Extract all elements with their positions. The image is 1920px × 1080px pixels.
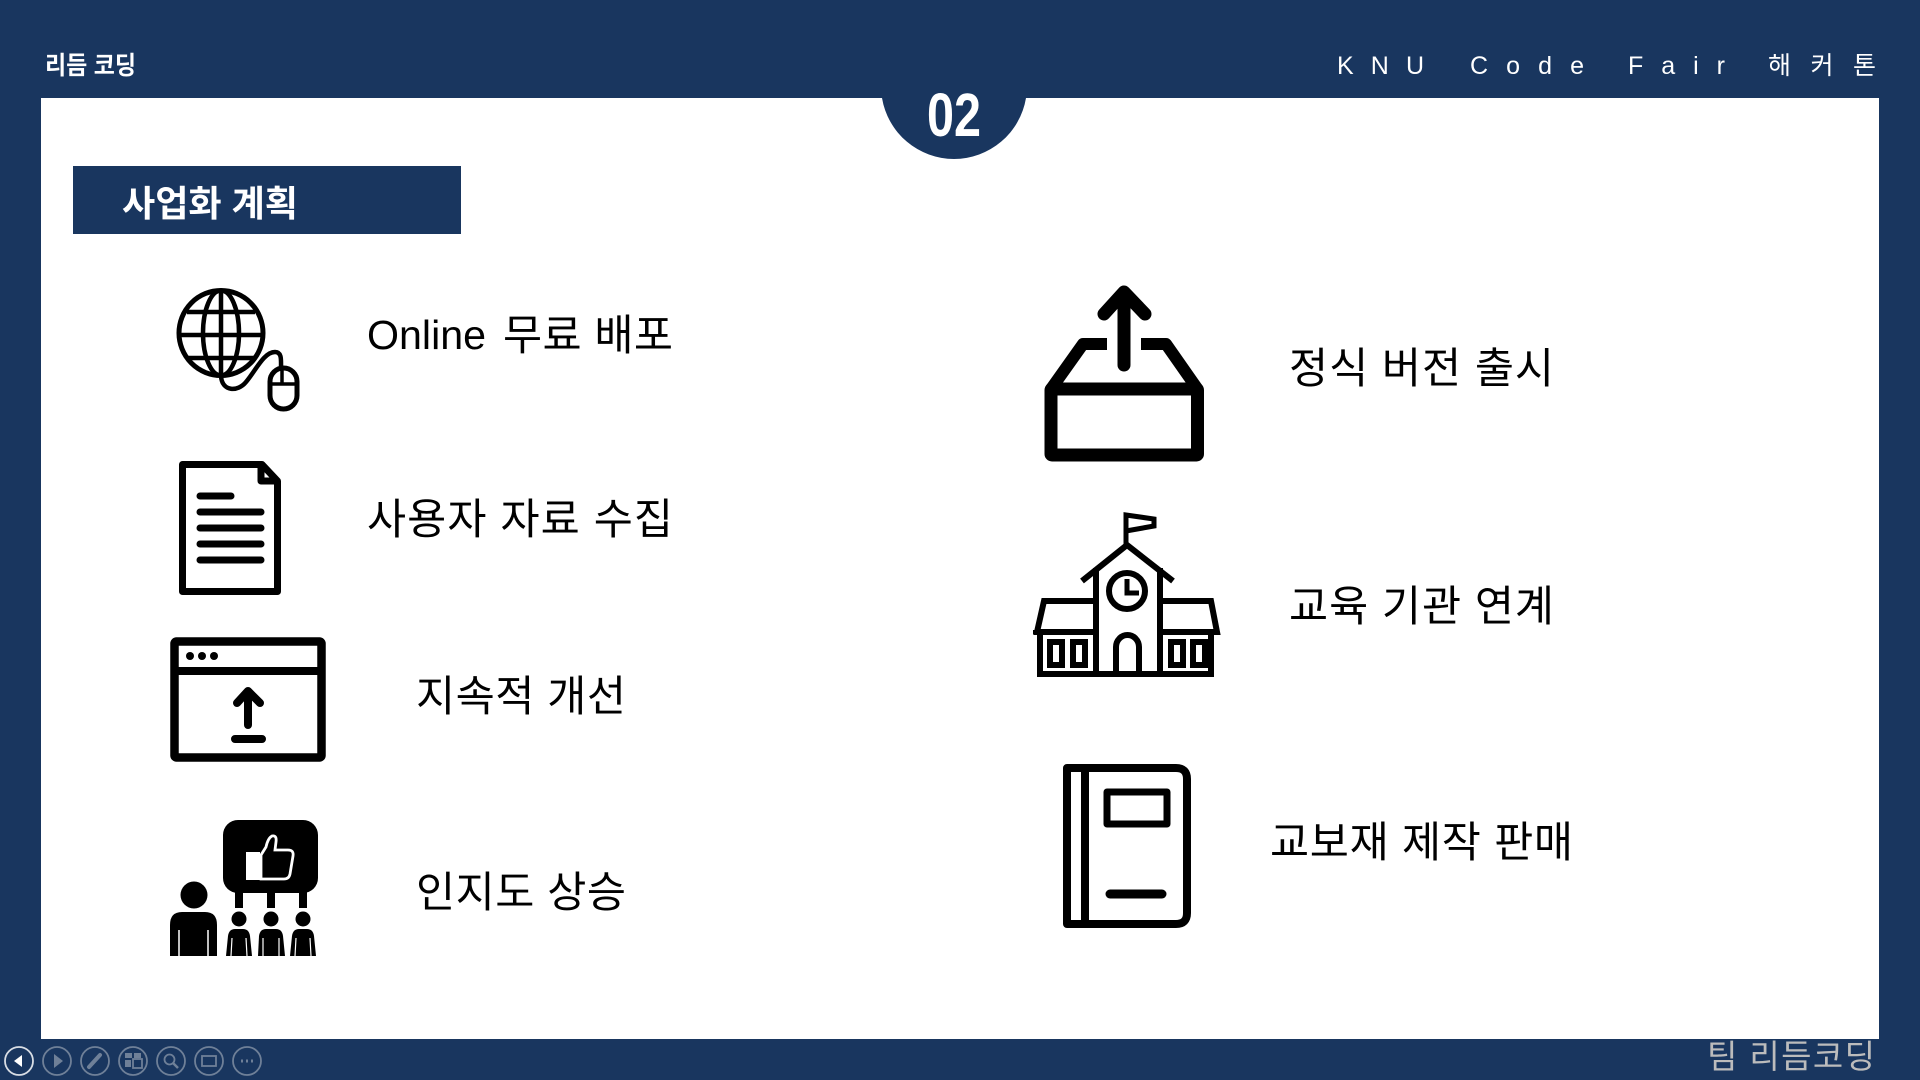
label: user data collection: 사용자 자료 수집: [367, 497, 673, 544]
label: online free distribution: 무료 배포: [503, 313, 673, 360]
header right: event name: 해커톤: [1768, 52, 1876, 80]
icon: globe with mouse: [179, 290, 297, 409]
section number badge: 02: [927, 81, 981, 149]
header right: event name: Fair: [1628, 52, 1725, 80]
section heading: [73, 166, 461, 234]
header right: event name: [1337, 52, 1876, 80]
icon: box with upward arrow: [1051, 292, 1198, 455]
label: online free distribution: [367, 312, 673, 360]
icon: audience with thumbs-up board: [170, 820, 318, 956]
label: awareness growth: 인지도 상승: [416, 870, 626, 917]
icon: document: [182, 464, 278, 592]
icon: textbook: [1067, 768, 1187, 924]
label: official release: 정식 버전 출시: [1289, 346, 1554, 393]
label: education institution partnership: 교육 기관 연계: [1289, 584, 1554, 631]
icon: school building: [1033, 513, 1219, 674]
header right: event name: Code: [1470, 52, 1584, 80]
label: continuous improvement: 지속적 개선: [416, 674, 626, 721]
icon: browser window with upload arrow: [174, 642, 322, 758]
header left: team name: 리듬 코딩: [45, 52, 136, 80]
slideshow navigation controls: [5, 1047, 261, 1075]
label: textbook production and sale: 교보재 제작 판매: [1270, 820, 1573, 867]
footer team name: 팀 리듬코딩: [1707, 1038, 1875, 1075]
section number badge: [882, 81, 1026, 159]
header right: event name: KNU: [1337, 52, 1424, 80]
label: online free distribution: Online: [367, 312, 486, 358]
section heading: 사업화 계획: [122, 183, 298, 224]
